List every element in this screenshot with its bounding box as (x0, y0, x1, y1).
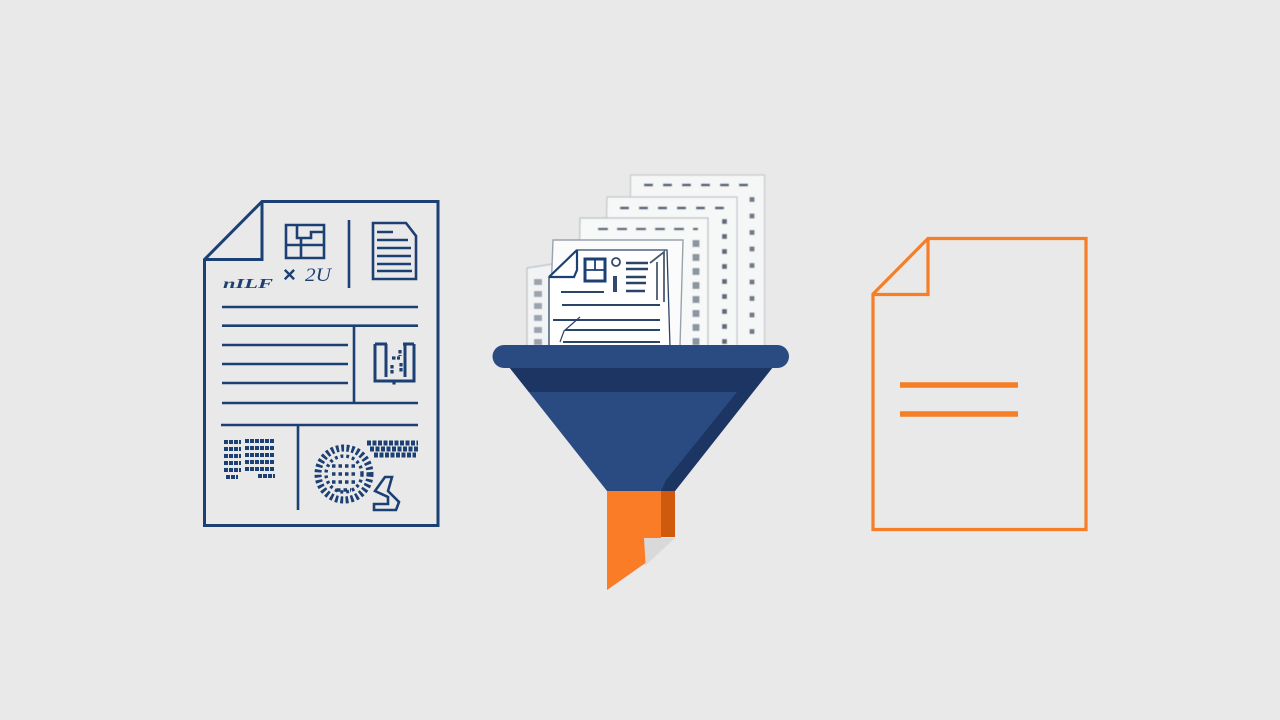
icon: dense text cluster (224, 441, 275, 477)
caption: header text marks: nILF (223, 277, 274, 292)
funnel side shadow (661, 392, 753, 491)
page: third sheet (604, 197, 737, 347)
caption: header text marks: × (283, 262, 296, 287)
icon: diagram thumbnail (286, 225, 324, 258)
funnel rim (492, 345, 789, 368)
icon: page thumbnail (373, 223, 416, 279)
output sheet orange (607, 491, 661, 590)
page: front sheet (549, 240, 683, 347)
output text lines (900, 385, 1018, 414)
icon: circular seal (318, 448, 370, 500)
funnel cone (509, 367, 773, 491)
icon: complex input document (204, 202, 438, 526)
illustration: funnel (492, 345, 789, 590)
page: second sheet (578, 218, 708, 347)
output sheet shadow (644, 538, 675, 566)
caption: header text marks (223, 262, 332, 292)
funnel inner shadow band (509, 367, 773, 392)
icon: small clustered marks (367, 443, 418, 510)
icon: map thumbnail (375, 344, 414, 386)
output sheet darker side (661, 491, 675, 537)
caption: header text marks: 2U (305, 265, 332, 286)
page: back sheet (630, 175, 764, 347)
illustration: stacked pages entering funnel (527, 175, 764, 347)
icon: simplified output document (873, 238, 1086, 530)
page: fourth small sheet (527, 264, 553, 347)
